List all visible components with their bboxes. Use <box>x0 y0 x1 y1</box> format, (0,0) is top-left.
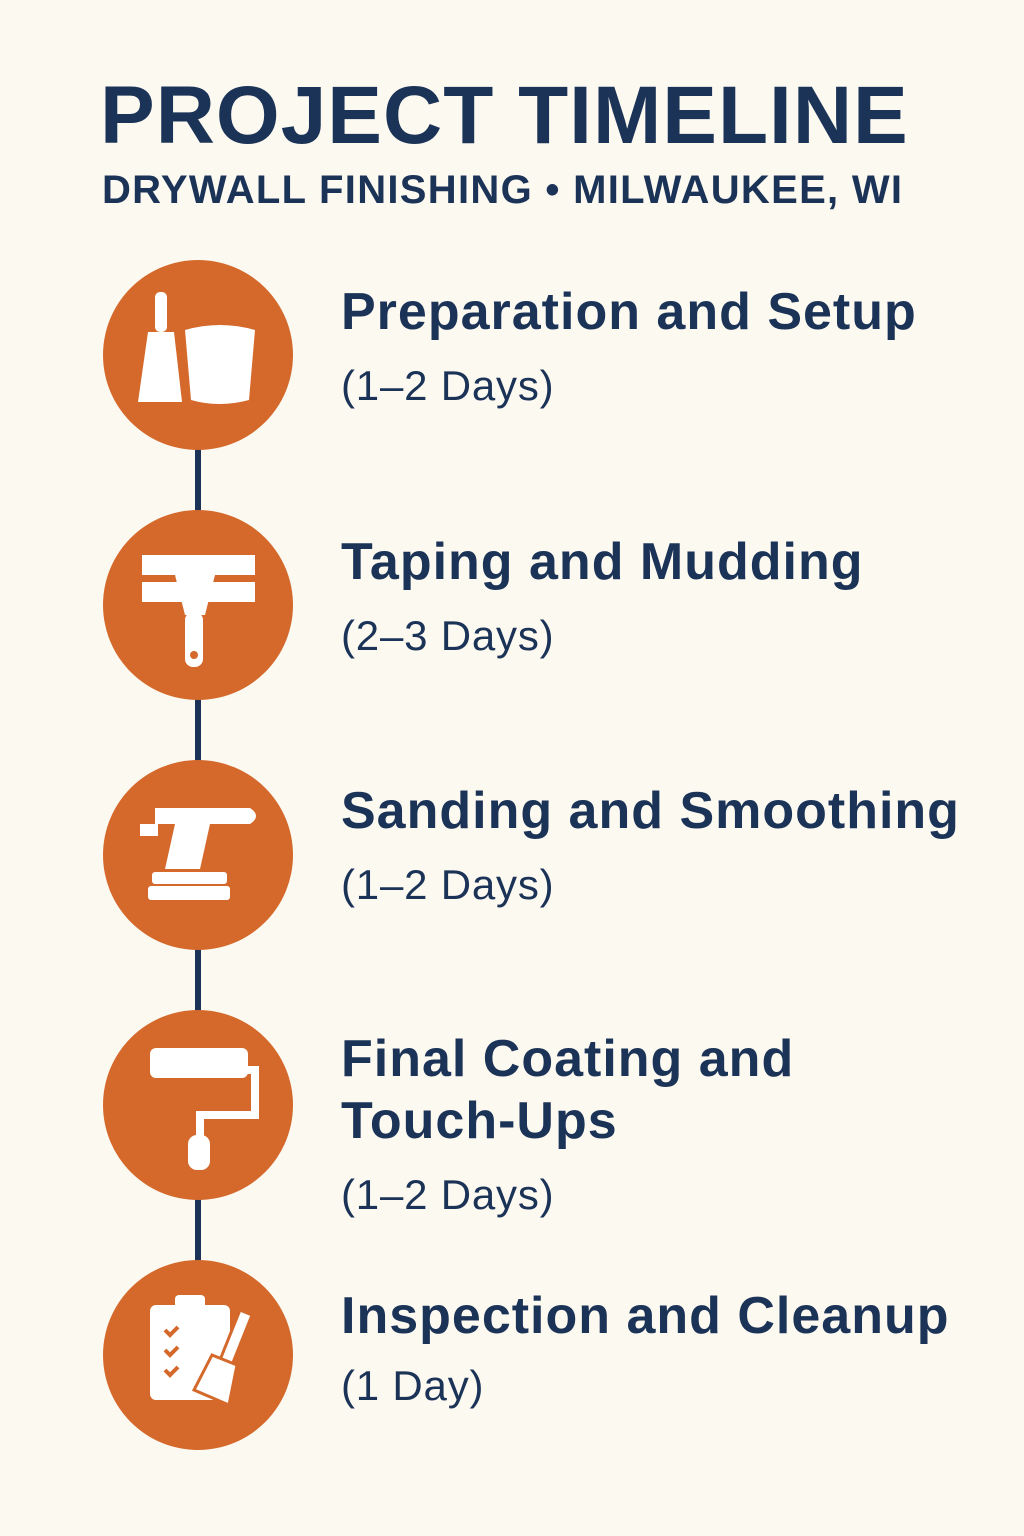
step 5 text: (1 Day) <box>341 1362 484 1409</box>
icon: brush and bucket <box>103 260 293 450</box>
step 2 text: Taping and Mudding <box>341 533 864 591</box>
step 3 text: Sanding and Smoothing <box>341 782 960 840</box>
step 2 text: (2–3 Days) <box>341 612 554 659</box>
step 4 text: Touch-Ups <box>341 1092 618 1150</box>
connector line <box>195 440 201 1280</box>
title: PROJECT TIMELINE <box>100 70 909 161</box>
subtitle: DRYWALL FINISHING • MILWAUKEE, WI <box>102 168 903 212</box>
step 5 text <box>341 1287 950 1409</box>
icon: taping knife <box>103 510 293 700</box>
step 1 text: Preparation and Setup <box>341 283 917 341</box>
icon: clipboard and broom <box>103 1260 293 1450</box>
step 4 text <box>341 1030 794 1218</box>
step 1 text <box>341 283 917 409</box>
step 5 text: Inspection and Cleanup <box>341 1287 950 1345</box>
icon: sander <box>103 760 293 950</box>
step 4 text: (1–2 Days) <box>341 1171 554 1218</box>
step 3 text: (1–2 Days) <box>341 861 554 908</box>
step 3 text <box>341 782 960 908</box>
step 1 text: (1–2 Days) <box>341 362 554 409</box>
icon: paint roller <box>103 1010 293 1200</box>
step 2 text <box>341 533 864 659</box>
step 4 text: Final Coating and <box>341 1030 794 1088</box>
